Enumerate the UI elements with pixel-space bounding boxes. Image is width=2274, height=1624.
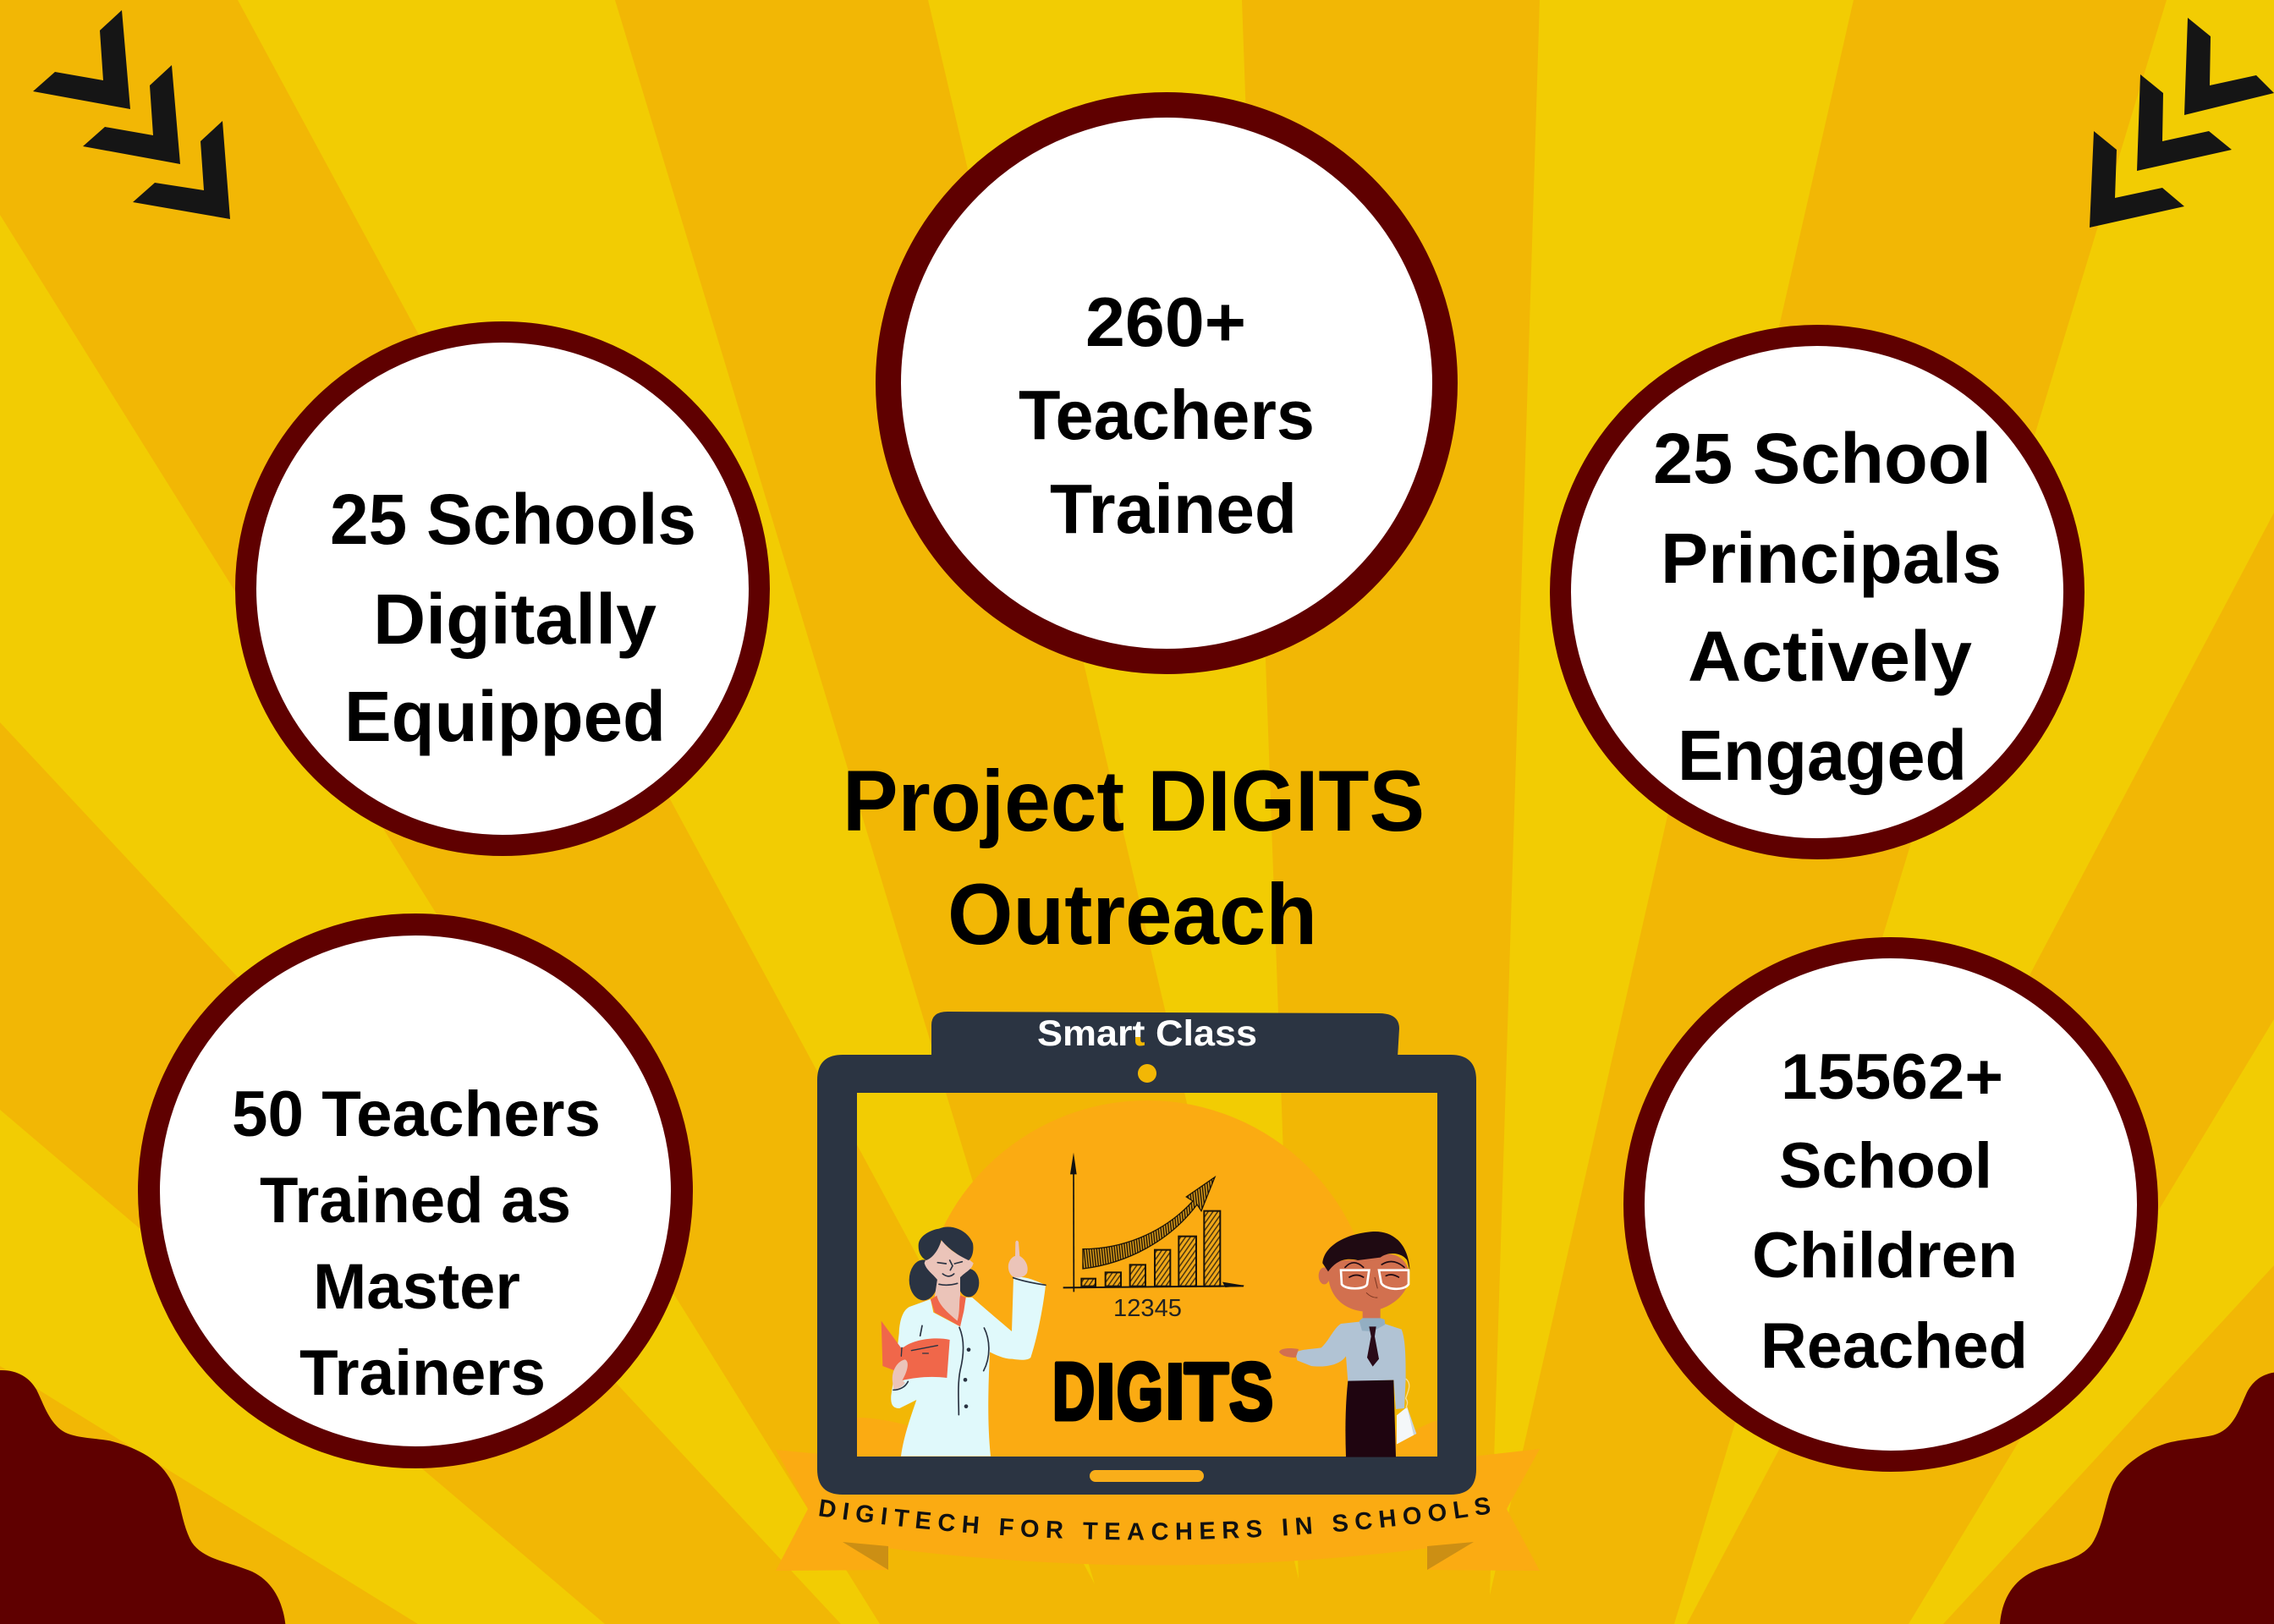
circle: 50 Teachers Trained as Master Trainers bbox=[149, 924, 682, 1457]
woman teacher bbox=[882, 1226, 1046, 1457]
chart axis numbers: 12345 bbox=[1113, 1295, 1182, 1322]
circle: 260+ Teachers Trained: Teachers bbox=[1019, 376, 1315, 454]
bar chart with rising arrow bbox=[1063, 1153, 1245, 1292]
tablet frame bbox=[817, 1012, 1476, 1495]
circle: 25 School Principals Actively Engaged bbox=[1560, 335, 2074, 849]
DIGITS wordmark: I bbox=[1095, 1347, 1117, 1437]
circle: 50 Teachers Trained as Master Trainers: Trainers bbox=[299, 1337, 546, 1409]
circle: 50 Teachers Trained as Master Trainers: Master bbox=[313, 1251, 520, 1323]
circle: 15562+ School Children Reached bbox=[1634, 947, 2147, 1462]
ribbon bbox=[776, 1449, 1540, 1571]
circle: 15562+ School Children Reached: 15562+ bbox=[1781, 1041, 2003, 1113]
title: Project DIGITS Outreach: Outreach bbox=[948, 866, 1317, 963]
icon: top-left chevrons bbox=[33, 10, 230, 219]
circle: 260+ Teachers Trained: Trained bbox=[1050, 469, 1297, 548]
circle: 50 Teachers Trained as Master Trainers: Trained as bbox=[260, 1165, 571, 1237]
icon: top-right chevrons bbox=[2090, 18, 2274, 228]
decoration: bottom-right blob bbox=[2000, 1373, 2274, 1624]
decoration: bottom-left blob bbox=[0, 1370, 285, 1624]
ribbon text: DIGITECH FOR TEACHERS IN SCHOOLS bbox=[819, 1497, 1491, 1540]
man teacher bbox=[1279, 1232, 1416, 1457]
circle: 25 Schools Digitally Equipped: Digitally bbox=[373, 579, 656, 659]
DIGITS wordmark: T bbox=[1184, 1347, 1228, 1437]
circle: 260+ Teachers Trained: 260+ bbox=[1085, 283, 1246, 361]
DIGITS wordmark: G bbox=[1117, 1347, 1163, 1437]
circle: 25 Schools Digitally Equipped bbox=[245, 332, 760, 846]
screen illustration backdrop bbox=[857, 1100, 1437, 1457]
circle: 50 Teachers Trained as Master Trainers: 50 Teachers bbox=[232, 1078, 601, 1150]
DIGITS wordmark: D bbox=[1052, 1347, 1095, 1437]
circle: 25 School Principals Actively Engaged: Actively bbox=[1688, 617, 1972, 696]
circle: 15562+ School Children Reached: School bbox=[1779, 1130, 1992, 1202]
circle: 25 School Principals Actively Engaged: Principals bbox=[1661, 518, 2002, 598]
smart class label: Smart Class bbox=[1037, 1013, 1257, 1054]
DIGITS wordmark bbox=[1052, 1347, 1273, 1437]
title: Project DIGITS Outreach: Project DIGITS bbox=[843, 753, 1425, 849]
circle: 25 Schools Digitally Equipped: 25 Schools bbox=[330, 480, 696, 559]
circle: 25 School Principals Actively Engaged: 25 School bbox=[1653, 419, 1991, 498]
home button bbox=[1090, 1470, 1204, 1482]
DIGITS wordmark: S bbox=[1229, 1347, 1273, 1437]
title: Project DIGITS Outreach bbox=[843, 753, 1425, 963]
circle: 260+ Teachers Trained bbox=[888, 105, 1445, 661]
circle: 15562+ School Children Reached: Children bbox=[1752, 1220, 2018, 1292]
circle: 25 Schools Digitally Equipped: Equipped bbox=[344, 677, 666, 756]
camera dot bbox=[1138, 1064, 1156, 1083]
DIGITS wordmark: I bbox=[1164, 1347, 1186, 1437]
circle: 15562+ School Children Reached: Reached bbox=[1760, 1310, 2028, 1382]
logo: Digitech ribbon and smart class tablet bbox=[776, 1012, 1540, 1571]
circle: 25 School Principals Actively Engaged: Engaged bbox=[1678, 716, 1967, 795]
